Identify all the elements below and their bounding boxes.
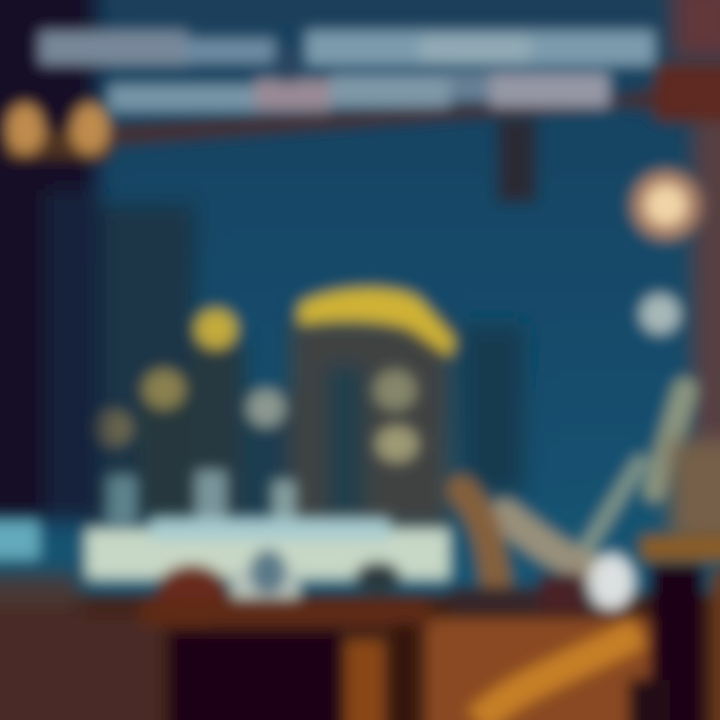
glass: dark bottle at right foreground (630, 535, 720, 720)
title band: illegible blurred heading rendered as soft light bands (38, 30, 655, 112)
title line 1 (38, 30, 655, 66)
right edge: brown sliver (712, 570, 720, 720)
beam: red bracket at upper right (655, 64, 720, 122)
floor right: warm orange table surface (425, 618, 665, 720)
river: bright pale waterfront band (0, 518, 450, 604)
title line 2 (108, 72, 610, 112)
light: pale window (246, 388, 286, 428)
building: main central tower (290, 320, 450, 530)
right wall: brown window frame (672, 0, 720, 540)
light: yellow rooftop glow (194, 308, 238, 350)
light: amber window (142, 368, 186, 410)
table leg: orange leg (345, 640, 385, 720)
skyline: buildings (85, 205, 524, 530)
light: dim window (92, 409, 134, 447)
table leg: dark leg (392, 625, 416, 720)
light: lower left pale column (105, 475, 137, 525)
object: dark bowl (356, 563, 400, 593)
chair: dark silhouette (170, 632, 340, 720)
object: red fruit (156, 566, 228, 626)
floor left: dark brown table surface (0, 612, 165, 720)
bridge: pale diagonal struts at right (462, 390, 685, 595)
light: central upper window (373, 369, 417, 411)
object: maroon block (540, 575, 585, 613)
streak: golden light streak (478, 632, 640, 720)
horizon: brown ledge at left (0, 575, 80, 615)
light: lower pale column (195, 470, 227, 525)
right edge lower: brown pier (670, 440, 720, 540)
right lamp: pale small orb (639, 293, 681, 335)
hanging lamp: dark pendant (498, 118, 536, 202)
light: central lower window (375, 425, 419, 463)
building: far left tower (85, 205, 195, 525)
objects: small shapes on the table (156, 550, 635, 626)
title gap: dark spot between title words (276, 46, 300, 82)
right lamp: bright orb and halo (630, 169, 702, 241)
building: central tower dark core (325, 365, 365, 520)
wall lamps: twin amber lights at top left (5, 102, 110, 160)
lights: glowing building windows (92, 308, 419, 525)
lamp: shared warm halo (5, 130, 110, 160)
left wall: dark window frame (0, 0, 100, 520)
object: blue-grey vase (250, 550, 286, 594)
roof: yellow arched roof of central tower (298, 287, 456, 358)
object: white cup at right (589, 553, 635, 611)
lamp: left glow (5, 102, 45, 154)
top beam: dark red beam under title (105, 64, 720, 146)
object: dark band at right of waterfront (450, 588, 600, 614)
building: mid tower (190, 340, 245, 525)
building: short left block (140, 380, 195, 520)
table: wooden edge (140, 600, 430, 626)
light: lower central pale column (272, 480, 296, 525)
building: right dark tower (462, 325, 524, 495)
lamp: right glow (70, 102, 110, 154)
foreground base: dark ground beneath the scene (0, 595, 720, 720)
building: narrow tower (240, 395, 290, 525)
